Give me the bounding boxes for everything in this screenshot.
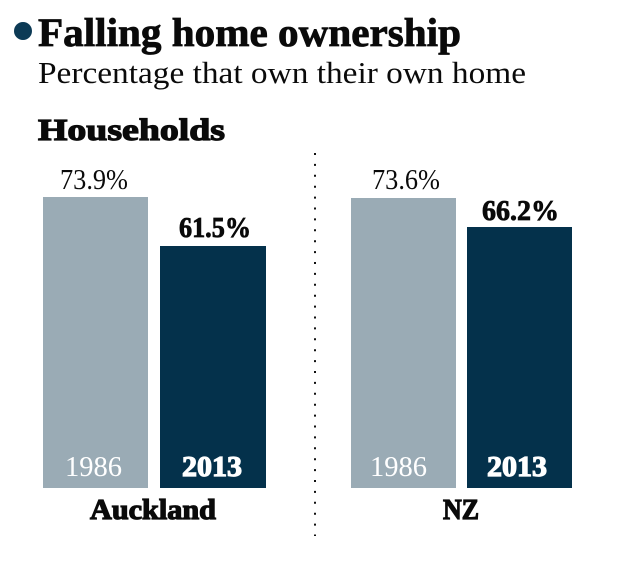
category label: Auckland: Auckland [90, 495, 216, 526]
bar: NZ 2013 [467, 227, 572, 488]
icon: title bullet [14, 22, 32, 40]
value: NZ 1986: 73.6% [372, 164, 440, 196]
category label: NZ: NZ [443, 495, 479, 526]
year label: Auckland 2013: 2013 [182, 452, 242, 483]
bar: Auckland 2013 [160, 246, 266, 488]
panel: NZ bar chart [351, 164, 572, 526]
year label: Auckland 1986: 1986 [65, 452, 122, 483]
value: Auckland 1986: 73.9% [60, 164, 128, 196]
value: Auckland 2013: 61.5% [179, 212, 251, 244]
subtitle: Percentage that own their own home [38, 55, 526, 90]
value: NZ 2013: 66.2% [482, 195, 559, 227]
bar: Auckland 1986 [43, 197, 148, 488]
bar: NZ 1986 [351, 198, 456, 488]
section heading: households: Households [38, 112, 225, 147]
divider: dotted line [314, 153, 316, 536]
title: Falling home ownership [38, 10, 461, 55]
year label: NZ 1986: 1986 [370, 452, 427, 483]
year label: NZ 2013: 2013 [487, 452, 547, 483]
panel: Auckland bar chart [43, 164, 266, 526]
